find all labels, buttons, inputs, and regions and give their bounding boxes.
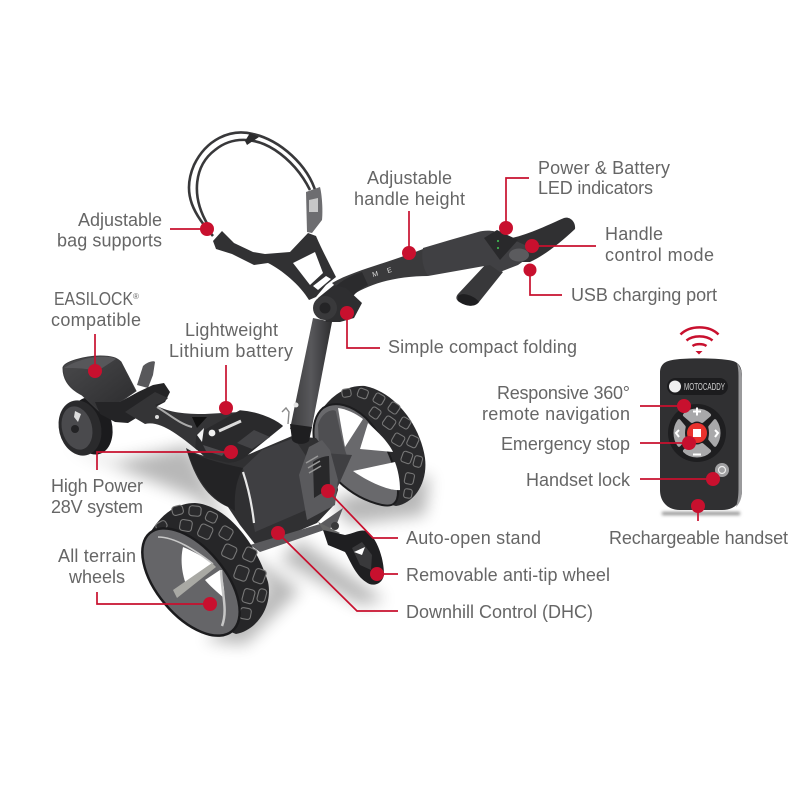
callout: all terrain wheels: All terrain — [58, 546, 136, 566]
callout: handset lock — [526, 470, 720, 490]
callout: downhill control — [271, 526, 593, 622]
main column — [290, 318, 332, 444]
callout: EASILOCK compatible — [51, 289, 141, 378]
callout: handle control mode: Handle — [605, 224, 663, 244]
EASILOCK mount — [63, 356, 170, 423]
remote handset — [660, 358, 742, 510]
callout: lightweight lithium battery: Lithium battery — [169, 341, 293, 361]
callout: responsive 360 remote navigation: remote navigation — [482, 404, 630, 424]
callout: high power 28V system: 28V system — [51, 497, 143, 517]
callout: rechargeable handset — [609, 499, 788, 548]
callout: EASILOCK compatible: ® — [133, 292, 139, 301]
rear wheel — [313, 386, 425, 506]
callout: auto-open stand — [321, 484, 541, 548]
callout: EASILOCK compatible: EASILOCK — [54, 289, 133, 309]
callout: adjustable bag supports: bag supports — [57, 230, 162, 250]
callout: USB charging port: USB charging port — [571, 285, 717, 305]
callout: adjustable bag supports — [57, 210, 214, 250]
bag support ring and arms — [189, 132, 336, 300]
ground shadows — [62, 445, 430, 645]
callout: adjustable handle height: Adjustable — [367, 168, 452, 188]
anti-tip wheel — [318, 522, 384, 585]
callout: lightweight lithium battery: Lightweight — [185, 320, 278, 340]
callout: power and battery LED indicators — [499, 158, 670, 235]
callout: responsive 360 remote navigation: Responsive 360° — [497, 383, 630, 403]
callout: handset lock: Handset lock — [526, 470, 631, 490]
callout: simple compact folding: Simple compact folding — [388, 337, 577, 357]
callout: high power 28V system: High Power — [51, 476, 143, 496]
golf trolley illustration — [53, 132, 575, 653]
callout: emergency stop: Emergency stop — [501, 434, 630, 454]
handle: ME — [372, 267, 393, 279]
callout: handle control mode — [525, 224, 714, 265]
callout: adjustable bag supports: Adjustable — [78, 210, 162, 230]
callout: emergency stop — [501, 434, 696, 454]
callout: removable anti-tip wheel: Removable anti-tip wheel — [406, 565, 610, 585]
callout: all terrain wheels — [58, 546, 217, 611]
power button — [715, 463, 729, 477]
main body — [186, 436, 343, 552]
navigation pad — [668, 404, 726, 462]
callout: responsive 360 remote navigation — [482, 383, 691, 424]
callout: auto-open stand: Auto-open stand — [406, 528, 541, 548]
callout: lightweight lithium battery — [169, 320, 293, 415]
callout: all terrain wheels: wheels — [68, 567, 125, 587]
logo badge — [667, 378, 728, 395]
callout: adjustable handle height: handle height — [354, 189, 465, 209]
folding hub and lever — [313, 285, 362, 322]
callout: downhill control: Downhill Control (DHC) — [406, 602, 593, 622]
callout: power and battery LED indicators: LED indicators — [538, 178, 653, 198]
handset shadow — [662, 512, 740, 515]
callout: USB charging port — [524, 264, 717, 305]
callout: simple compact folding — [340, 306, 577, 357]
callout: EASILOCK compatible: compatible — [51, 310, 141, 330]
callout: rechargeable handset: Rechargeable handset — [609, 528, 788, 548]
logo badge: MOTOCADDY — [684, 382, 725, 393]
callout: handle control mode: control mode — [605, 245, 714, 265]
front big wheel — [124, 503, 269, 653]
callout: power and battery LED indicators: Power & Battery — [538, 158, 670, 178]
handle — [332, 218, 575, 306]
callout: high power 28V system — [51, 445, 238, 517]
chassis arm — [125, 392, 255, 450]
callout: adjustable handle height — [354, 168, 465, 260]
front small wheel — [53, 393, 118, 460]
icon: wifi signal — [680, 327, 718, 354]
battery — [196, 408, 289, 462]
